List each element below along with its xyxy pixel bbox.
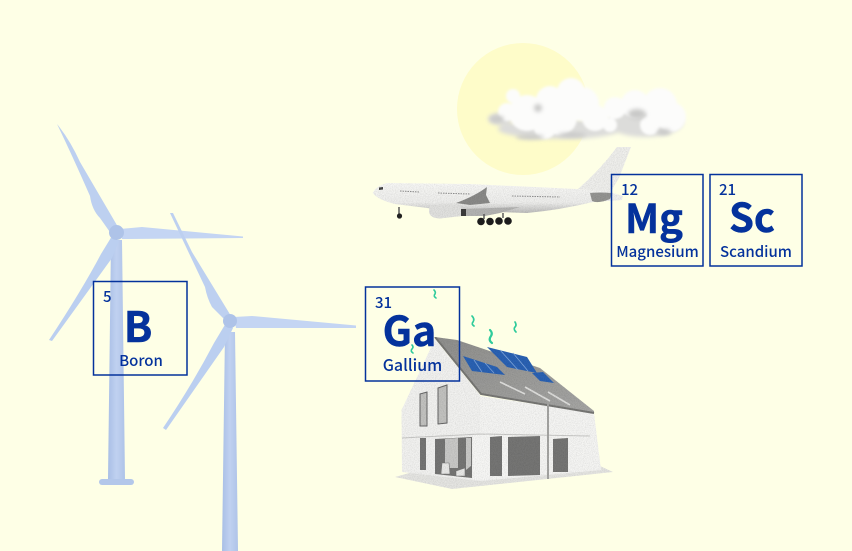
hub <box>109 225 124 240</box>
element card: Magnesium: Mg <box>625 187 683 245</box>
roof edge <box>435 337 594 413</box>
element card: Scandium <box>710 174 802 266</box>
element card: Boron <box>94 282 187 375</box>
solar panel: right <box>532 372 554 383</box>
element card: Gallium: Ga <box>383 298 436 358</box>
solar panel: middle <box>487 347 537 373</box>
element card: Magnesium <box>612 174 703 266</box>
icon: house with solar panels <box>395 337 613 489</box>
element card: Gallium: 31 <box>375 292 392 313</box>
gable wall <box>402 339 480 481</box>
element card: Magnesium: Magnesium <box>616 241 699 262</box>
element card: Gallium <box>366 287 460 381</box>
window lines <box>400 191 560 197</box>
tail fin <box>578 147 631 193</box>
cockpit window <box>379 187 383 190</box>
element card: Scandium: Scandium <box>720 241 792 262</box>
hub <box>223 314 237 328</box>
lower wing <box>463 207 520 216</box>
blades <box>170 213 231 322</box>
tailplane <box>590 192 612 202</box>
drain pipe <box>547 402 549 479</box>
pillars <box>473 435 508 480</box>
icon: green vapour wisps <box>411 290 516 353</box>
engine <box>429 204 462 218</box>
panel grid <box>474 350 528 373</box>
icon: cloud <box>488 78 686 140</box>
element card: Scandium: Sc <box>729 186 775 244</box>
element card: Gallium: Gallium <box>383 352 442 376</box>
solar panel: left <box>463 356 505 375</box>
floor band <box>402 434 590 438</box>
icon: sun <box>457 43 589 175</box>
landing gear <box>397 207 512 225</box>
ground floor windows <box>420 436 568 478</box>
upper windows <box>420 385 447 426</box>
wing <box>456 187 490 205</box>
roof <box>435 337 594 414</box>
element card: Boron: 5 <box>103 286 112 307</box>
terrace chairs <box>441 463 465 476</box>
curtains <box>445 438 471 470</box>
element card: Boron: B <box>124 294 152 355</box>
element card: Magnesium: 12 <box>621 179 638 200</box>
wind turbine: left <box>49 124 243 485</box>
element card: Scandium: 21 <box>719 179 736 200</box>
element card: Boron: Boron <box>119 350 163 371</box>
base <box>99 479 134 485</box>
icon: airplane <box>373 147 631 225</box>
wind turbine: right <box>163 213 356 551</box>
tower <box>222 332 238 551</box>
fuselage <box>373 183 623 213</box>
skylights <box>500 382 570 405</box>
side wall <box>480 396 601 481</box>
blades <box>57 124 118 235</box>
ground terrace <box>395 466 613 489</box>
tower <box>108 240 125 480</box>
